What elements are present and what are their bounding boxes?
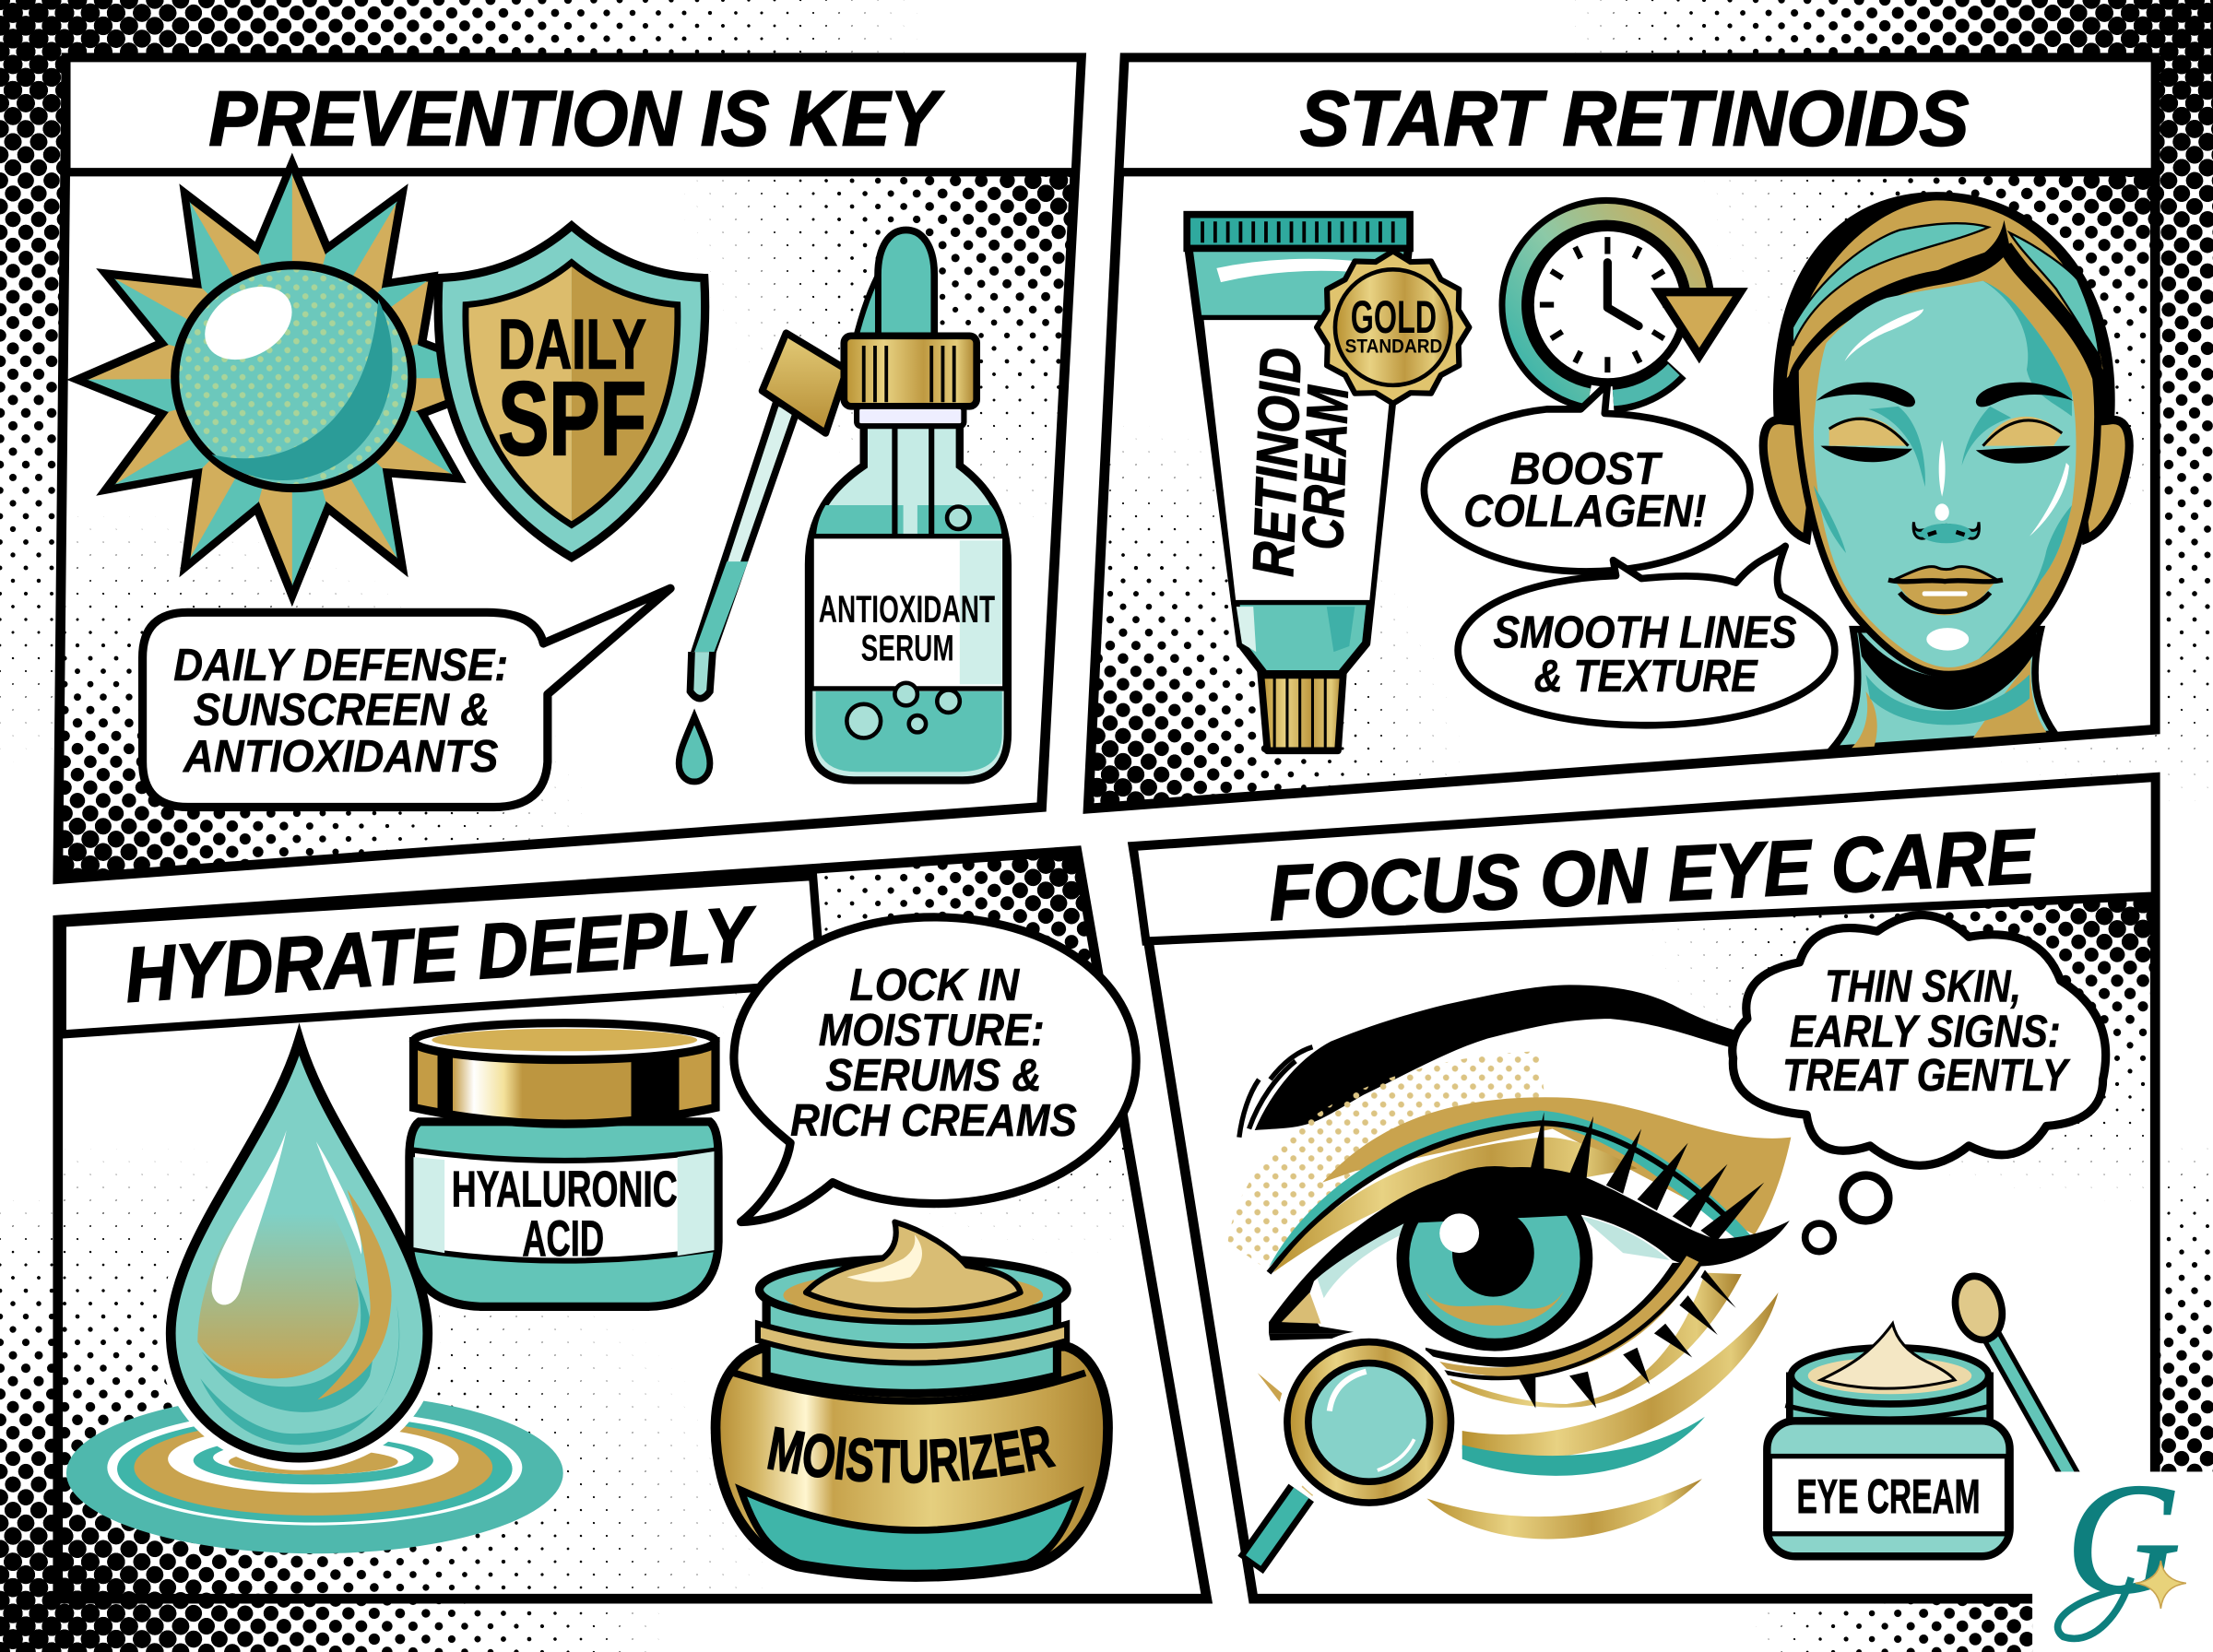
speech bubble: smooth lines and texture: SMOOTH LINES	[1493, 608, 1797, 658]
speech bubble: smooth lines and texture	[1458, 546, 1835, 726]
badge: gold standard seal: GOLD	[1351, 290, 1437, 343]
heading: focus on eye care	[1133, 777, 2155, 941]
icon: moisturizer jar: MOISTURIZER	[767, 1426, 1057, 1484]
icon: moisturizer jar	[710, 1219, 1113, 1582]
speech bubble: daily defense: ANTIOXIDANTS	[183, 732, 499, 782]
illustration: under-eye swooshes	[1258, 1292, 1779, 1539]
icon: daily SPF shield: SPF	[498, 360, 646, 478]
heading: start retinoids: START RETINOIDS	[1300, 76, 1969, 162]
illustration: face with closed eyes	[1763, 192, 2129, 749]
thought bubble: thin skin	[1733, 914, 2106, 1252]
speech bubble: boost collagen: BOOST	[1510, 444, 1663, 494]
icon: clock with circular arrow	[1513, 212, 1740, 398]
speech bubble: lock in moisture: SERUMS &	[825, 1051, 1042, 1101]
icon: spatula	[1948, 1271, 2073, 1481]
badge: gold standard seal	[1317, 251, 1469, 404]
panel: hydrate deeply	[53, 845, 1213, 1604]
speech bubble: daily defense: DAILY DEFENSE:	[173, 641, 508, 690]
iris	[1402, 1173, 1586, 1345]
speech bubble: boost collagen: COLLAGEN!	[1463, 487, 1707, 537]
icon: retinoid cream tube: CREAM	[1291, 384, 1361, 550]
icon: dropper pipette	[679, 230, 934, 782]
icon: daily SPF shield: DAILY	[498, 305, 646, 384]
icon: daily SPF shield	[438, 226, 705, 558]
speech bubble: lock in moisture: RICH CREAMS	[790, 1096, 1077, 1146]
icon: retinoid cream tube: RETINOID	[1241, 347, 1314, 578]
heading: prevention is key: PREVENTION IS KEY	[209, 76, 944, 162]
heading: focus on eye care: FOCUS ON EYE CARE	[1267, 812, 2039, 937]
speech bubble: lock in moisture	[734, 917, 1136, 1222]
speech bubble: daily defense	[143, 588, 670, 808]
illustration: eye with gold and teal makeup	[1228, 1051, 1791, 1409]
thought bubble: thin skin: TREAT GENTLY	[1782, 1051, 2071, 1101]
jaw shadow	[1857, 628, 2037, 710]
speech bubble: lock in moisture: LOCK IN	[849, 961, 1021, 1010]
logo: G with sparkle: G	[2066, 1452, 2181, 1627]
speech bubble: lock in moisture: MOISTURE:	[819, 1006, 1045, 1056]
heading: prevention is key	[66, 58, 1081, 172]
icon: eye cream jar with spatula: EYE CREAM	[1796, 1470, 1980, 1524]
neck	[1832, 630, 2055, 749]
panel: prevention is key	[58, 58, 1081, 879]
icon: magnifying glass	[1250, 1330, 1461, 1564]
illustration: water ripple	[66, 1393, 563, 1553]
icon: hyaluronic acid jar	[409, 1023, 718, 1306]
speech bubble: daily defense: SUNSCREEN &	[194, 686, 490, 736]
bottle label: SERUM	[861, 628, 954, 668]
icon: water drop	[171, 1040, 428, 1457]
icon: eye cream jar with spatula	[1767, 1271, 2073, 1556]
bottle label: ANTIOXIDANT	[819, 588, 995, 631]
thought bubble: thin skin: EARLY SIGNS:	[1790, 1008, 2061, 1057]
icon: hyaluronic acid jar: ACID	[522, 1210, 604, 1267]
icon: hyaluronic acid jar: HYALURONIC	[452, 1161, 678, 1218]
panel: start retinoids	[1088, 58, 2155, 808]
head and hair	[1773, 192, 2115, 479]
speech bubble: smooth lines and texture: & TEXTURE	[1534, 652, 1758, 702]
icon: antioxidant serum bottle with dropper	[679, 230, 1008, 782]
heading: hydrate deeply: HYDRATE DEEPLY	[123, 890, 761, 1019]
badge: gold standard seal: STANDARD	[1345, 336, 1442, 358]
icon: retinoid cream tube	[1187, 215, 1410, 750]
speech bubble: boost collagen	[1424, 384, 1750, 572]
icon: eyebrow	[1239, 985, 1734, 1138]
icon: sun with starburst rays	[77, 164, 515, 596]
panel: focus on eye care	[1133, 777, 2155, 1599]
bottle label	[811, 537, 1005, 689]
heading: start retinoids	[1119, 58, 2155, 172]
thought bubble: thin skin: THIN SKIN,	[1825, 962, 2021, 1012]
logo: G with sparkle	[2032, 1452, 2213, 1652]
